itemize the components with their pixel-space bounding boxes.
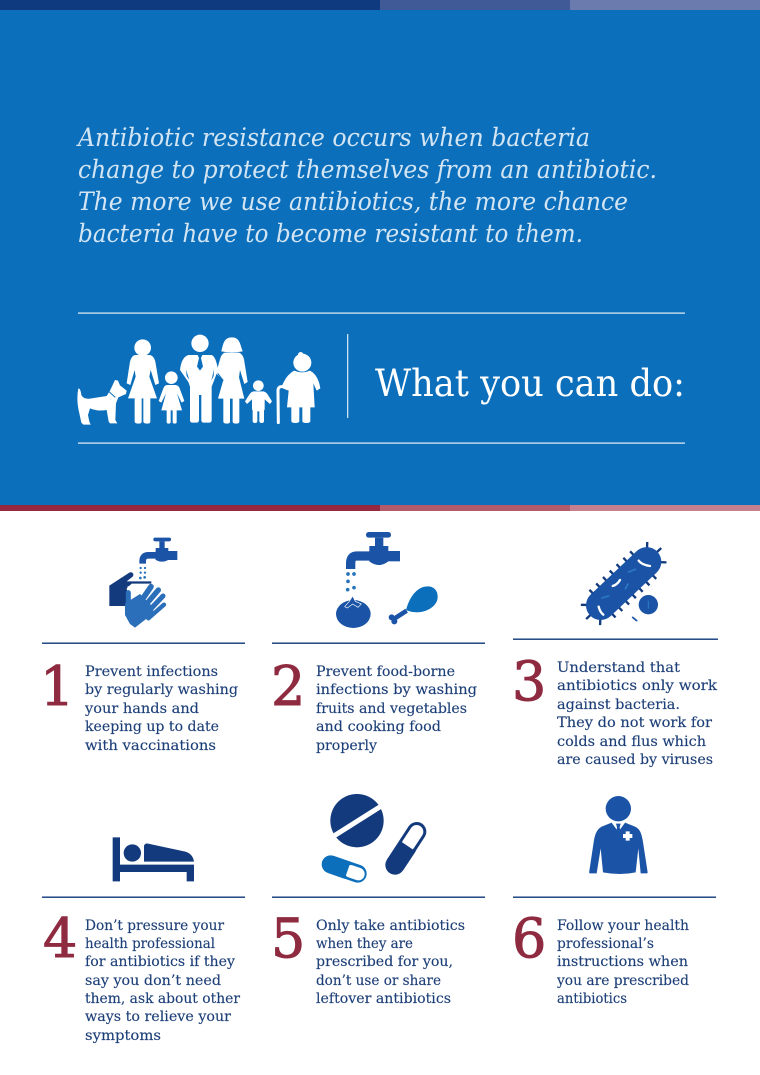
top colour band: [0, 0, 760, 10]
text: step 3: They do not work for: [557, 715, 712, 731]
text: step 4: health professional: [85, 936, 215, 952]
text: step 1: your hands and: [84, 701, 199, 717]
icon: health professional: [589, 796, 648, 874]
intro text: bacteria have to become resistant to them.: [78, 219, 583, 248]
red divider band: [0, 505, 760, 511]
heading: What you can do: What you can do:: [375, 362, 685, 405]
text: step 5: leftover antibiotics: [316, 991, 451, 1007]
text: step 4: [85, 918, 240, 1044]
icon: family with dog: [77, 335, 320, 425]
text: step 3: Understand that: [557, 660, 680, 676]
text: step 5: [316, 918, 465, 1007]
text: step 2: Prevent food-borne: [316, 664, 455, 680]
step 4: [42, 837, 245, 1044]
text: step 6: antibiotics: [557, 991, 627, 1007]
number 1: 1: [40, 655, 74, 718]
step 6: [512, 796, 716, 1007]
text: step 3: [557, 660, 717, 768]
number 5: 5: [271, 907, 305, 970]
text: step 4: say you don’t need: [85, 973, 221, 989]
text: step 4: symptoms: [85, 1028, 161, 1044]
panel: blue header: [0, 0, 760, 505]
text: step 2: properly: [316, 738, 378, 754]
text: step 6: you are prescribed: [556, 973, 689, 989]
text: step 4: ways to relieve your: [85, 1009, 231, 1025]
text: step 5: Only take antibiotics: [316, 918, 465, 934]
intro text: The more we use antibiotics, the more chance: [78, 187, 628, 216]
number 6: 6: [512, 907, 546, 970]
text: step 6: instructions when: [557, 954, 688, 970]
text: step 6: professional’s: [557, 936, 654, 952]
intro text: change to protect themselves from an antibiotic.: [78, 155, 657, 184]
text: step 3: are caused by viruses: [557, 752, 713, 768]
step 5: [271, 794, 485, 1007]
icon: tap, tomato and chicken leg: [336, 532, 438, 628]
text: step 5: when they are: [316, 936, 413, 952]
text: step 4: for antibiotics if they: [85, 954, 236, 970]
text: step 3: colds and flus which: [557, 734, 706, 750]
text: step 1: keeping up to date: [85, 719, 219, 735]
text: step 2: [316, 664, 477, 754]
text: step 2: infections by washing: [316, 682, 477, 698]
number 3: 3: [512, 650, 546, 713]
step 2: [271, 532, 485, 754]
text: step 2: and cooking food: [316, 719, 441, 735]
text: step 5: prescribed for you,: [316, 954, 453, 970]
icon: bacterium: [575, 536, 673, 631]
step 3: [512, 536, 718, 768]
icon: pills and capsules: [330, 794, 417, 874]
text: step 1: with vaccinations: [85, 738, 216, 754]
intro text: Antibiotic resistance occurs when bacteria: [76, 123, 590, 152]
number 4: 4: [43, 907, 77, 970]
text: step 1: Prevent infections: [85, 664, 218, 680]
intro text: [76, 123, 657, 248]
text: step 6: [556, 918, 689, 1007]
text: step 4: them, ask about other: [85, 991, 240, 1007]
text: step 1: by regularly washing: [85, 682, 238, 698]
text: step 5: don’t use or share: [316, 973, 441, 989]
text: step 6: Follow your health: [557, 918, 689, 934]
text: step 4: Don’t pressure your: [85, 918, 224, 934]
icon: hand washing under tap: [109, 538, 177, 628]
step 1: [40, 538, 245, 754]
text: step 2: fruits and vegetables: [316, 701, 467, 717]
text: step 3: antibiotics only work: [557, 678, 717, 694]
icon: person in bed: [113, 837, 194, 881]
number 2: 2: [271, 655, 305, 718]
text: step 1: [84, 664, 238, 754]
text: step 3: against bacteria.: [557, 697, 680, 713]
